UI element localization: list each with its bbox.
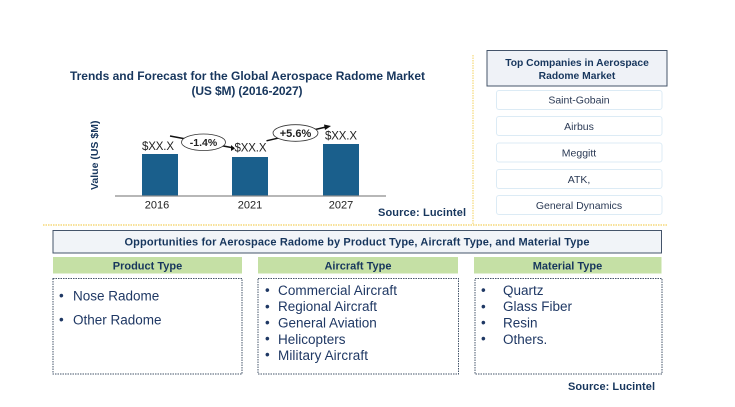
aircraft type list: General Aviation [278, 316, 377, 330]
aircraft type heading: Aircraft Type [324, 260, 392, 272]
trend arrow: 2016 to 2021: -1.4% [190, 137, 218, 149]
product type list [59, 288, 162, 328]
material type list: Quartz [503, 283, 544, 298]
bar chart [89, 121, 386, 212]
source: opportunities: Source: Lucintel [568, 381, 655, 393]
company list: Saint-Gobain [548, 94, 610, 106]
aircraft type heading [258, 257, 458, 274]
companies heading [487, 50, 667, 86]
product type list: • [59, 312, 64, 327]
panel: product type [53, 257, 242, 374]
panel: aircraft type [258, 257, 458, 374]
year labels: 2016 [145, 200, 169, 212]
company list: Airbus [564, 121, 594, 133]
aircraft type list: Helicopters [278, 332, 346, 347]
company list: General Dynamics [536, 200, 622, 212]
trend arrow: 2021 to 2027 [266, 124, 331, 141]
aircraft type list: Regional Aircraft [278, 299, 377, 314]
value labels: $XX.X [234, 142, 267, 154]
material type heading: Material Type [533, 260, 602, 272]
trend arrow: 2021 to 2027: +5.6% [280, 128, 311, 140]
product type heading: Product Type [113, 260, 182, 272]
material type list: Glass Fiber [503, 299, 573, 314]
panel: top companies [487, 50, 667, 214]
trend arrow: 2016 to 2021 [170, 134, 235, 151]
chart title: Trends and Forecast for the Global Aerospace Radome Market [70, 69, 425, 83]
companies heading: Top Companies in Aerospace [505, 58, 649, 69]
value labels: $XX.X [142, 141, 174, 153]
aircraft type list: • [265, 347, 270, 362]
opportunities heading: Opportunities for Aerospace Radome by Product Type, Aircraft Type, and Material Type [124, 236, 590, 248]
product type list: • [59, 288, 64, 303]
chart title [70, 69, 425, 98]
company list [496, 90, 662, 214]
opportunities heading [53, 230, 662, 253]
aircraft type list: • [265, 282, 270, 298]
material type list: • [481, 315, 486, 330]
material type list: Others. [503, 332, 547, 347]
product type list: Nose Radome [73, 288, 159, 304]
companies heading: Radome Market [539, 71, 616, 82]
aircraft type list: Military Aircraft [278, 348, 368, 363]
value labels: $XX.X [325, 130, 357, 142]
company list: Meggitt [562, 148, 596, 160]
company list: ATK, [568, 174, 590, 186]
aircraft type list: • [265, 299, 270, 314]
source: chart: Source: Lucintel [378, 207, 466, 219]
aircraft type list: • [265, 315, 270, 330]
material type heading [474, 257, 662, 274]
panel: material type [474, 257, 662, 374]
year labels [145, 200, 353, 212]
aircraft type list [265, 282, 397, 363]
aircraft type list: Commercial Aircraft [278, 283, 397, 298]
chart title: (US $M) (2016-2027) [192, 84, 302, 98]
material type list: • [481, 299, 486, 314]
material type list [481, 282, 573, 347]
product type list: Other Radome [73, 312, 162, 328]
material type list: • [481, 282, 486, 298]
year labels: 2021 [238, 200, 262, 212]
bars [142, 144, 359, 196]
material type list: • [481, 331, 486, 346]
product type heading [53, 257, 242, 274]
value labels [142, 130, 357, 154]
y axis label: Value (US $M) [89, 121, 101, 190]
year labels: 2027 [329, 200, 353, 212]
material type list: Resin [503, 316, 538, 330]
aircraft type list: • [265, 331, 270, 346]
